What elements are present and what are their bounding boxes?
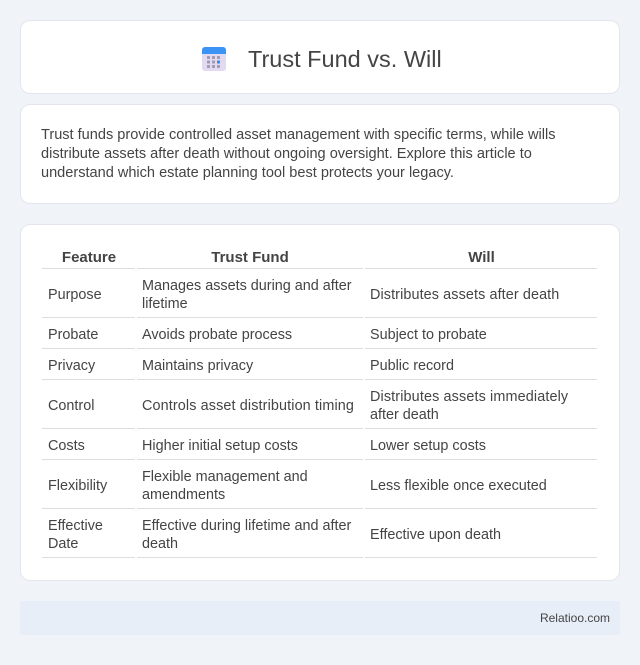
table header: Trust Fund bbox=[211, 249, 289, 266]
row: Privacy bbox=[48, 358, 454, 374]
intro text bbox=[41, 127, 555, 181]
row: Effective Date: Effective upon death bbox=[370, 527, 501, 543]
row: Effective Date: Effective during lifetime and after bbox=[142, 518, 351, 534]
row: Effective Date: Effective bbox=[48, 518, 103, 534]
row: Flexibility: Flexibility bbox=[48, 478, 107, 494]
panel: title card bbox=[20, 20, 620, 94]
row: Purpose: lifetime bbox=[142, 296, 188, 312]
footer bar bbox=[20, 601, 620, 635]
row: Effective Date: Date bbox=[48, 536, 78, 552]
row: Costs: Costs bbox=[48, 438, 85, 454]
intro text: Trust funds provide controlled asset management with specific terms, while wills bbox=[41, 127, 555, 143]
table header: Will bbox=[468, 249, 495, 266]
row: Effective Date bbox=[48, 518, 501, 552]
row: Probate: Probate bbox=[48, 327, 98, 343]
row: Flexibility: Flexible management and bbox=[142, 469, 308, 485]
row: Control: Controls asset distribution timing bbox=[142, 398, 354, 414]
row: Flexibility: amendments bbox=[142, 487, 225, 503]
row: Purpose: Manages assets during and after bbox=[142, 278, 352, 294]
intro text: understand which estate planning tool best protects your legacy. bbox=[41, 165, 454, 181]
row: Purpose: Purpose bbox=[48, 287, 102, 303]
row: Control: Control bbox=[48, 398, 94, 414]
row: Costs bbox=[48, 438, 486, 454]
panel: introduction bbox=[20, 104, 620, 204]
row: Privacy: Maintains privacy bbox=[142, 358, 253, 374]
row: Effective Date: death bbox=[142, 536, 178, 552]
row: Flexibility bbox=[48, 469, 547, 503]
row: Control bbox=[48, 389, 568, 423]
table header: Feature bbox=[62, 249, 116, 266]
row: Purpose bbox=[48, 278, 559, 312]
intro text: distribute assets after death without ongoing oversight. Explore this article to bbox=[41, 146, 532, 162]
table header bbox=[62, 249, 495, 266]
panel: comparison table bbox=[20, 224, 620, 581]
row: Probate bbox=[48, 327, 487, 343]
row: Probate: Subject to probate bbox=[370, 327, 487, 343]
row: Costs: Lower setup costs bbox=[370, 438, 486, 454]
title: Trust Fund vs. Will bbox=[248, 46, 442, 72]
row: Flexibility: Less flexible once executed bbox=[370, 478, 547, 494]
row: Privacy: Privacy bbox=[48, 358, 95, 374]
row: Costs: Higher initial setup costs bbox=[142, 438, 298, 454]
icon: calendar bbox=[202, 47, 226, 71]
row: Control: after death bbox=[370, 407, 439, 423]
row: Purpose: Distributes assets after death bbox=[370, 287, 559, 303]
footer text: Relatioo.com bbox=[540, 611, 610, 625]
row: Probate: Avoids probate process bbox=[142, 327, 292, 343]
row: Control: Distributes assets immediately bbox=[370, 389, 568, 405]
row: Privacy: Public record bbox=[370, 358, 454, 374]
